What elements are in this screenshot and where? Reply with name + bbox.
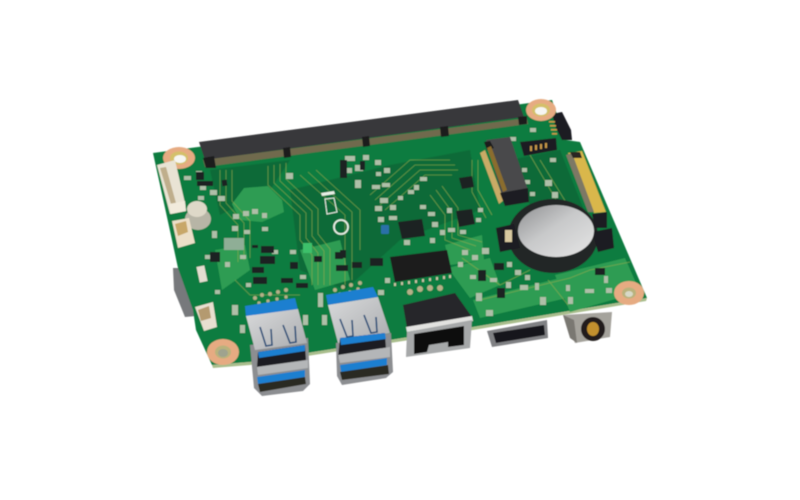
copper mounting holes (163, 99, 644, 365)
dark green copper zones (210, 150, 590, 290)
board label marks (321, 191, 348, 234)
USB port right (326, 287, 393, 385)
light green copper patches (215, 186, 640, 318)
memory slot: contact band (203, 118, 528, 167)
white connector lower left (195, 302, 217, 331)
memory slot: dark notches (203, 116, 527, 168)
coin battery (518, 205, 594, 257)
black header with gold pins (520, 138, 557, 156)
M.2 socket (480, 137, 529, 206)
mounting screw (185, 201, 211, 230)
pcb side edge (212, 298, 647, 368)
USB port left (245, 298, 310, 396)
large dual in-line chip (390, 250, 452, 286)
small black ICs (196, 160, 605, 298)
HDMI port (487, 320, 548, 347)
flat cable connector (566, 151, 606, 213)
corner header (549, 112, 572, 140)
ethernet port (403, 293, 473, 357)
small surface components (184, 120, 612, 333)
via dots near USB ports (253, 281, 443, 305)
battery holder (496, 199, 614, 273)
circuit traces (220, 155, 630, 305)
power jack (563, 312, 612, 343)
left side metal connector (173, 268, 196, 317)
small white switch (196, 265, 208, 283)
white connector top left (157, 160, 186, 214)
memory slot: top face (199, 100, 524, 160)
white connector middle left (172, 218, 195, 248)
pcb board (153, 100, 647, 365)
board assembly (153, 99, 647, 396)
green block component (303, 243, 312, 253)
blue trim component (381, 225, 389, 234)
